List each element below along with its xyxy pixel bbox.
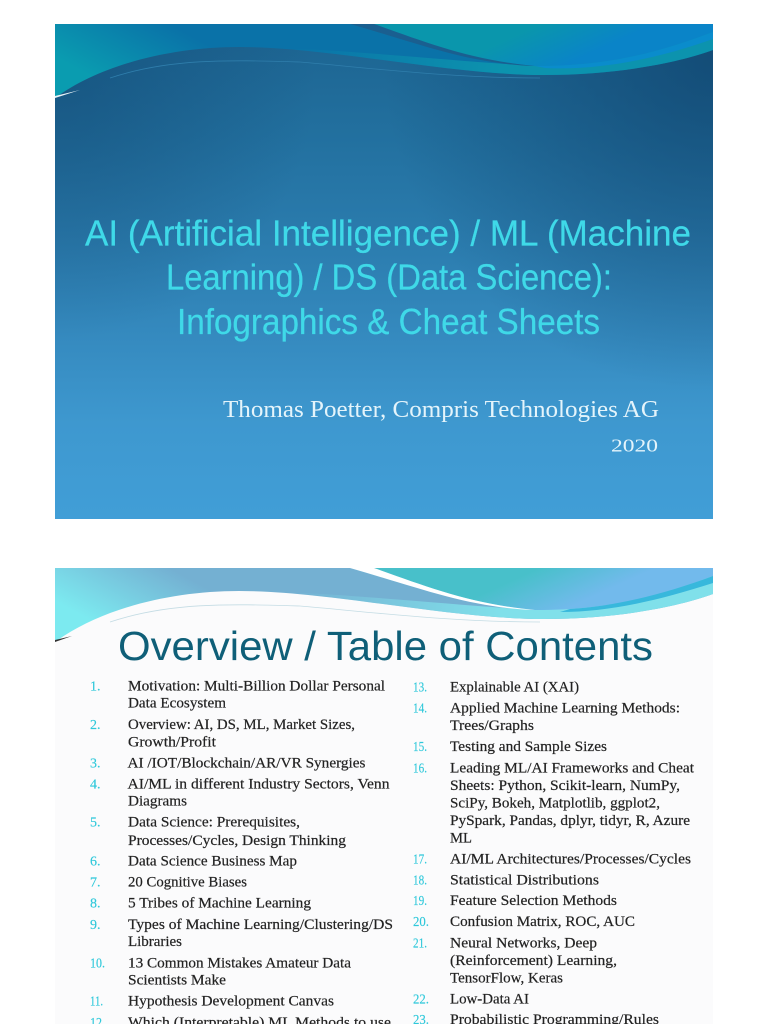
contents list: left column: Hypothesis Development Canvas <box>128 994 334 1010</box>
contents list: right column: Trees/Graphs <box>450 718 534 734</box>
contents list: right column: TensorFlow, Keras <box>450 970 563 986</box>
contents list: right column: 21. <box>413 936 427 951</box>
contents list: left column: Types of Machine Learning/Clustering/DS <box>128 917 393 933</box>
contents list: right column: 15. <box>413 740 427 755</box>
contents list: right column: Testing and Sample Sizes <box>450 739 607 755</box>
contents list: left column: 3. <box>90 756 100 771</box>
contents list: left column: Motivation: Multi-Billion Dollar Personal <box>128 679 385 695</box>
title <box>85 212 691 342</box>
contents list: left column: Growth/Profit <box>128 735 216 751</box>
header wave: teal band <box>239 24 713 75</box>
contents list: right column: 17. <box>413 852 427 867</box>
header wave: bright ribbon <box>560 576 713 612</box>
contents list: left column: 6. <box>90 855 100 870</box>
right edge shading <box>55 24 713 519</box>
contents list: left column: 1. <box>90 680 100 695</box>
left edge shading <box>55 24 713 519</box>
header wave: faint line <box>110 605 540 622</box>
header wave: right blue area <box>374 568 713 610</box>
contents list: left column: Overview: AI, DS, ML, Market Sizes, <box>128 717 355 733</box>
contents list: left column: 10. <box>90 957 105 972</box>
contents list: left column: Diagrams <box>128 794 187 810</box>
contents list: left column: Data Ecosystem <box>128 696 227 712</box>
header wave: white ribbon <box>350 568 535 610</box>
header wave: left sweep <box>55 568 713 642</box>
contents list: left column: 20 Cognitive Biases <box>128 875 247 891</box>
contents list: right column: 13. <box>413 681 427 696</box>
contents list: right column: 19. <box>413 894 427 909</box>
contents list: right column <box>413 680 694 1024</box>
contents list: left column: Libraries <box>128 934 182 950</box>
contents list: right column: AI/ML Architectures/Processes/Cycles <box>450 851 691 867</box>
contents list: right column: ML <box>450 830 472 846</box>
contents list: right column: 14. <box>413 702 427 717</box>
title: Infographics & Cheat Sheets <box>177 301 600 342</box>
contents list: left column: 4. <box>90 777 100 792</box>
contents list: right column: PySpark, Pandas, dplyr, tidyr, R, Azure <box>450 813 690 829</box>
contents list: left column: Data Science Business Map <box>128 854 297 870</box>
contents list: left column: AI/ML in different Industry Sectors, Venn <box>128 776 390 792</box>
heading: Overview / Table of Contents <box>118 623 653 669</box>
year: 2020 <box>611 436 658 456</box>
contents list: right column: Explainable AI (XAI) <box>450 680 579 696</box>
contents list: left column: 8. <box>90 897 100 912</box>
header wave: teal band <box>239 568 713 619</box>
contents list: left column <box>90 679 393 1024</box>
contents list: right column: 16. <box>413 762 427 777</box>
panel: title slide <box>55 24 713 519</box>
panel: table of contents slide <box>55 568 713 1024</box>
contents list: left column: 11. <box>90 995 103 1010</box>
contents list: left column: 5. <box>90 816 100 831</box>
contents list: right column: Applied Machine Learning Methods: <box>450 701 680 717</box>
contents list: right column: 20. <box>413 915 429 930</box>
contents list: right column: Sheets: Python, Scikit-learn, NumPy, <box>450 778 680 794</box>
contents list: right column: 22. <box>413 992 429 1007</box>
contents list: right column: Feature Selection Methods <box>450 893 617 909</box>
contents list: left column: AI /IOT/Blockchain/AR/VR Synergies <box>128 755 366 771</box>
contents list: left column: 9. <box>90 918 100 933</box>
contents list: right column: Confusion Matrix, ROC, AUC <box>450 914 635 930</box>
contents list: left column: 5 Tribes of Machine Learning <box>128 896 311 912</box>
contents list: left column: Processes/Cycles, Design Thinking <box>128 833 346 849</box>
author line: Thomas Poetter, Compris Technologies AG <box>223 397 659 423</box>
header wave: bright ribbon <box>535 32 713 68</box>
contents list: right column: Low-Data AI <box>450 991 529 1007</box>
contents list: left column: Data Science: Prerequisites, <box>128 815 300 831</box>
white spark at wave start <box>55 90 80 98</box>
title: AI (Artificial Intelligence) / ML (Machine <box>85 212 691 254</box>
header wave: faint highlight line <box>110 61 540 78</box>
contents list: right column: SciPy, Bokeh, Matplotlib, ggplot2, <box>450 795 660 811</box>
dark spark at wave start <box>55 636 72 642</box>
slide background <box>55 568 713 1024</box>
contents list: left column: 7. <box>90 876 100 891</box>
contents list: right column: 18. <box>413 873 427 888</box>
contents list: left column: 2. <box>90 718 100 733</box>
contents list: right column: (Reinforcement) Learning, <box>450 953 617 969</box>
header wave: dark ribbon <box>350 24 535 66</box>
contents list: right column: Leading ML/AI Frameworks and Cheat <box>450 761 694 777</box>
title: Learning) / DS (Data Science): <box>166 256 612 298</box>
slide background gradient <box>55 24 713 519</box>
contents list: left column: Scientists Make <box>128 973 226 989</box>
header wave: left sweep <box>55 24 713 98</box>
contents list: right column: Neural Networks, Deep <box>450 935 597 951</box>
contents list: right column: Statistical Distributions <box>450 872 599 888</box>
contents list: left column: 13 Common Mistakes Amateur Data <box>128 956 352 972</box>
header wave: right blue area <box>374 24 713 66</box>
